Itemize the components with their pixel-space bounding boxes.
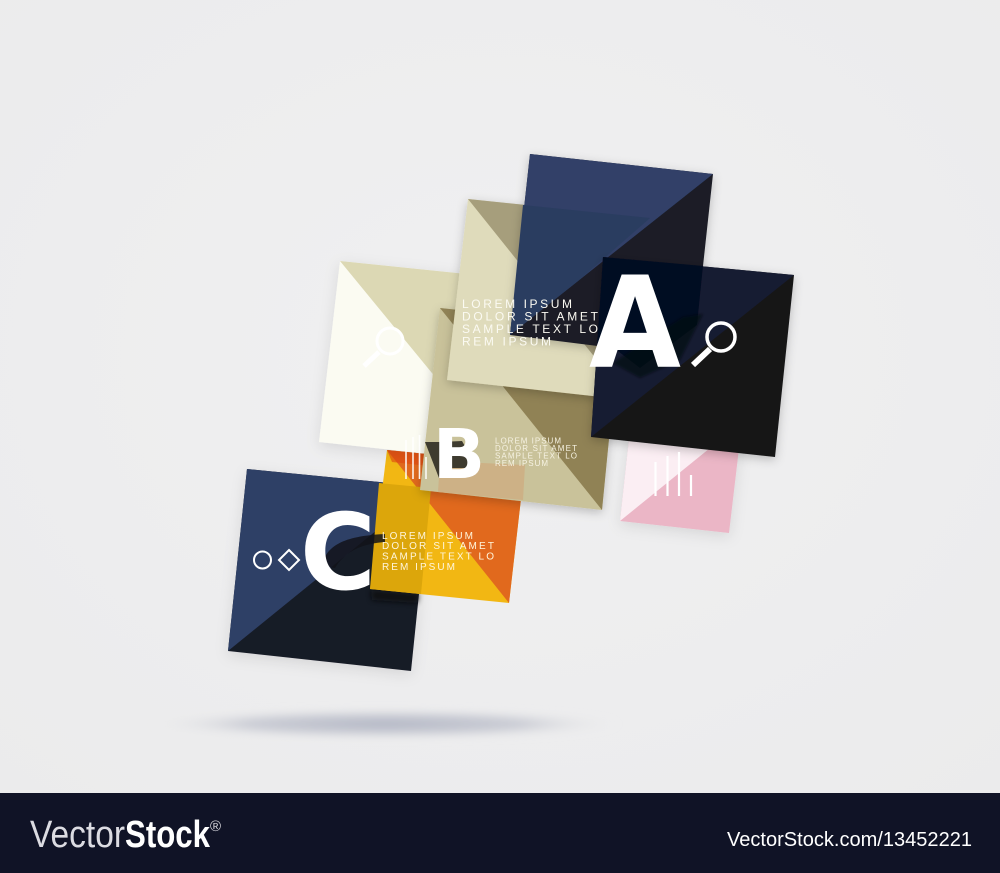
panel: khaki square B: [420, 308, 620, 510]
text block: C lorem: [382, 531, 494, 573]
text block: B lorem: [495, 436, 577, 468]
text block: top lorem: REM IPSUM: [462, 334, 551, 348]
icon: magnifier dark square: [693, 323, 735, 365]
logo wordmark: Stock: [125, 814, 211, 856]
panel: black square A: [591, 257, 794, 457]
letter C: C: [300, 492, 376, 614]
shadow under orange square: [371, 590, 419, 603]
panel: orange square: [370, 450, 525, 603]
text block: top lorem: DOLOR SIT AMET: [462, 310, 599, 324]
icon: bars B: [406, 435, 426, 479]
text block: top lorem: LOREM IPSUM: [462, 297, 572, 311]
letter B shadow: [425, 441, 470, 478]
panel: navy square top: [510, 154, 713, 358]
text block: top lorem: [462, 297, 599, 348]
text block: B lorem: SAMPLE TEXT LO: [495, 452, 577, 460]
text block: C lorem: SAMPLE TEXT LO: [382, 552, 494, 562]
letter B: B: [433, 415, 485, 495]
registered mark: ®: [210, 818, 221, 835]
text block: B lorem: REM IPSUM: [495, 459, 548, 468]
logo wordmark: Vector: [30, 814, 125, 856]
text block: B lorem: DOLOR SIT AMET: [495, 444, 577, 453]
text block: C lorem: LOREM IPSUM: [382, 531, 473, 542]
icon: circle and diamond: [254, 550, 299, 570]
icon: magnifier cream square: [364, 328, 403, 366]
image id: VectorStock.com/13452221: [727, 829, 972, 851]
text block: top lorem: SAMPLE TEXT LO: [462, 322, 598, 336]
footer banner: [0, 793, 1000, 873]
text block: C lorem: DOLOR SIT AMET: [382, 541, 494, 552]
text block: B lorem: LOREM IPSUM: [495, 436, 561, 446]
panel: pink square: [620, 430, 740, 533]
panel: cream square: [319, 261, 525, 462]
letter C shadow: [322, 534, 385, 568]
floor shadow: [150, 709, 620, 739]
panel: navy square C: [228, 469, 430, 671]
letter A: A: [589, 249, 681, 397]
icon: bars pink: [656, 452, 691, 496]
text block: C lorem: REM IPSUM: [382, 562, 455, 573]
panel: beige square top: [447, 199, 650, 400]
letter A shadow: [613, 314, 703, 378]
